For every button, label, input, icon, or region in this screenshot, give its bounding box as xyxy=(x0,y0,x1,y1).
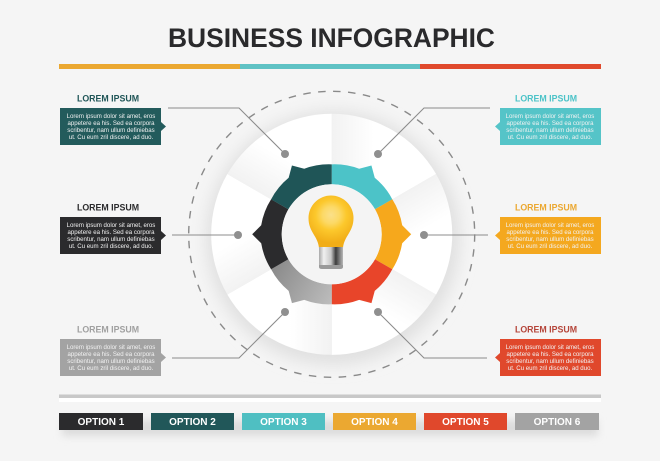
option 6 xyxy=(515,413,599,430)
option 3: OPTION 3 xyxy=(260,417,307,428)
panel: top left, dark teal: ut. Cu eum zril discere, ad duo. xyxy=(69,134,153,141)
tricolor header bar xyxy=(59,64,601,69)
option buttons shadow xyxy=(62,420,598,436)
panel: middle right, orange: ut. Cu eum zril discere, ad duo. xyxy=(508,243,592,250)
panel: bottom left, grey xyxy=(60,324,166,376)
panel: bottom right, red: scribentur, nam ullum definiebas xyxy=(506,358,594,365)
ring segment: red xyxy=(323,254,402,321)
panel: bottom right, red xyxy=(495,324,601,376)
icon: light bulb xyxy=(308,196,354,269)
panel: bottom left, grey: LOREM IPSUM xyxy=(77,324,139,334)
option 2: OPTION 2 xyxy=(169,417,216,428)
connector: top right xyxy=(374,108,490,158)
option 6: OPTION 6 xyxy=(534,417,581,428)
panel: top left, dark teal xyxy=(60,94,166,145)
panel: bottom left, grey: ut. Cu eum zril discere, ad duo. xyxy=(69,365,153,372)
option 5 xyxy=(424,413,507,430)
panel: middle left, black: LOREM IPSUM xyxy=(77,202,139,212)
panel: bottom left, grey: scribentur, nam ullum definiebas xyxy=(67,358,155,365)
white segmented disc xyxy=(175,84,488,385)
ring segment: teal xyxy=(323,148,402,214)
connector: top left xyxy=(168,108,289,158)
ring segment: black xyxy=(252,199,288,269)
panel: middle left, black: Lorem ipsum dolor sit amet, eros xyxy=(67,222,155,229)
panel: top right, teal xyxy=(495,94,601,145)
connector: bottom right xyxy=(374,308,487,358)
option 1: OPTION 1 xyxy=(78,417,125,428)
panel: middle left, black: scribentur, nam ullum definiebas xyxy=(67,236,155,243)
panel: top right, teal: ut. Cu eum zril discere, ad duo. xyxy=(508,134,592,141)
footer divider xyxy=(59,394,601,402)
option 2 xyxy=(151,413,234,430)
panel: top left, dark teal: scribentur, nam ullum definiebas xyxy=(67,127,155,134)
panel: top right, teal: scribentur, nam ullum definiebas xyxy=(506,127,594,134)
panel: bottom right, red: LOREM IPSUM xyxy=(515,324,577,334)
panel: middle left, black: ut. Cu eum zril discere, ad duo. xyxy=(69,243,153,250)
panel: top right, teal: Lorem ipsum dolor sit amet, eros xyxy=(506,113,594,120)
panel: middle right, orange: appetere ea his. Sed ea corpora xyxy=(506,229,594,236)
panel: bottom right, red: Lorem ipsum dolor sit amet, eros xyxy=(506,344,594,351)
option 5: OPTION 5 xyxy=(442,417,489,428)
connector: bottom left xyxy=(172,308,289,358)
six-part gear ring xyxy=(252,148,411,321)
panel: top left, dark teal: Lorem ipsum dolor sit amet, eros xyxy=(67,113,155,120)
option 1 xyxy=(59,413,143,430)
panel: middle right, orange: scribentur, nam ullum definiebas xyxy=(506,236,594,243)
connector: middle right xyxy=(420,231,488,239)
ring segment: dark teal xyxy=(262,148,340,214)
title: BUSINESS INFOGRAPHIC xyxy=(168,23,495,53)
option 4 xyxy=(333,413,416,430)
panel: middle left, black: appetere ea his. Sed ea corpora xyxy=(67,229,155,236)
central diagram xyxy=(175,84,488,385)
panel: middle left, black xyxy=(60,202,166,254)
legend: option buttons xyxy=(59,413,599,430)
panel: bottom right, red: ut. Cu eum zril discere, ad duo. xyxy=(508,365,592,372)
option 3 xyxy=(242,413,325,430)
panel: bottom left, grey: appetere ea his. Sed ea corpora xyxy=(67,351,155,358)
option 4: OPTION 4 xyxy=(351,417,398,428)
panel: top right, teal: appetere ea his. Sed ea corpora xyxy=(506,120,594,127)
dashed orbit xyxy=(189,91,475,377)
ring segment: grey xyxy=(262,254,340,321)
panel: middle right, orange: LOREM IPSUM xyxy=(515,202,577,212)
panel: bottom left, grey: Lorem ipsum dolor sit amet, eros xyxy=(67,344,155,351)
panel: bottom right, red: appetere ea his. Sed ea corpora xyxy=(506,351,594,358)
ring segment: orange xyxy=(375,199,411,269)
panel: middle right, orange: Lorem ipsum dolor sit amet, eros xyxy=(506,222,594,229)
panel: top right, teal: LOREM IPSUM xyxy=(515,94,577,104)
panel: middle right, orange xyxy=(495,202,601,254)
panel: top left, dark teal: appetere ea his. Sed ea corpora xyxy=(67,120,155,127)
inner circle xyxy=(282,184,382,284)
disc shadow xyxy=(206,111,460,365)
connector: middle left xyxy=(172,231,242,239)
panel: top left, dark teal: LOREM IPSUM xyxy=(77,94,139,104)
